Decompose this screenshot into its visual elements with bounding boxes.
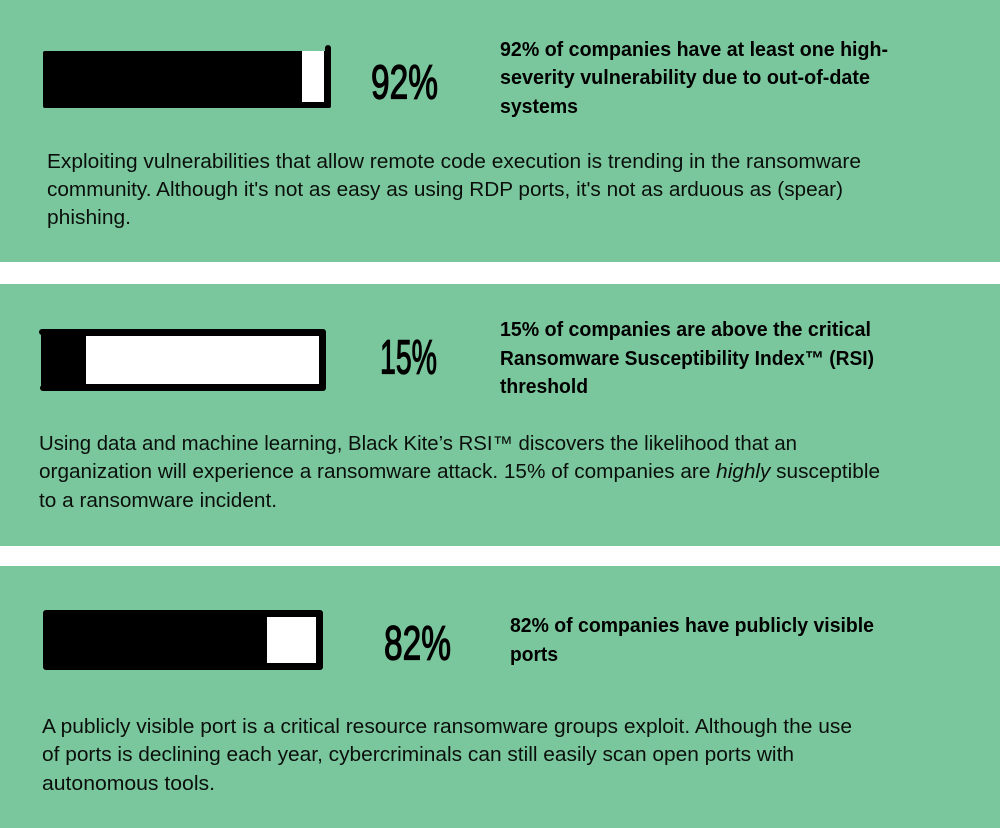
- panel: publicly visible ports: [0, 566, 1000, 828]
- body text: RSI explanation: to a ransomware incident.: [39, 490, 277, 512]
- heading: 82% of companies: [510, 615, 874, 666]
- heading: 92% of companies: 92% of companies have at least one high-: [500, 39, 888, 61]
- body text: port exploitation: of ports is declining each year, cybercriminals can still easily scan open ports with: [42, 744, 794, 766]
- body text: RSI explanation: [39, 433, 880, 512]
- heading: 15% of companies: threshold: [500, 376, 588, 398]
- heading: 15% of companies: Ransomware Susceptibility Index™ (RSI): [500, 348, 874, 370]
- heading: 15% of companies: 15% of companies are above the critical: [500, 319, 871, 341]
- body text: remote code execution: phishing.: [47, 207, 131, 229]
- body text: RSI explanation: organization will experience a ransomware attack. 15% of companies are highly susceptible: [39, 461, 880, 483]
- body text: remote code execution: [47, 151, 861, 229]
- heading: 92% of companies: severity vulnerability due to out-of-date: [500, 67, 870, 89]
- body text: remote code execution: community. Although it's not as easy as using RDP ports, it's not as arduous as (spear): [47, 179, 843, 201]
- body text: remote code execution: Exploiting vulnerabilities that allow remote code execution is trending in the ransomware: [47, 151, 861, 173]
- body text: port exploitation: [42, 716, 852, 795]
- body text: RSI explanation: Using data and machine learning, Black Kite’s RSI™ discovers the likelihood that an: [39, 433, 797, 455]
- progress bar: 15%: [39, 329, 326, 391]
- stat: 15%: 15%: [380, 332, 437, 384]
- body text: port exploitation: autonomous tools.: [42, 773, 215, 795]
- body text: port exploitation: A publicly visible port is a critical resource ransomware groups exploit. Although the use: [42, 716, 852, 738]
- panel: out-of-date systems: [0, 0, 1000, 262]
- panel: ransomware susceptibility index: [0, 284, 1000, 546]
- progress bar: 92%: [43, 45, 331, 108]
- heading: 92% of companies: systems: [500, 96, 578, 118]
- stat: 82%: 82%: [384, 618, 451, 670]
- stat: 92%: 92%: [371, 56, 438, 110]
- heading: 92% of companies: [500, 39, 888, 118]
- heading: 15% of companies: [500, 319, 874, 398]
- heading: 82% of companies: 82% of companies have publicly visible: [510, 615, 874, 637]
- heading: 82% of companies: ports: [510, 644, 558, 666]
- progress bar: 82%: [43, 610, 323, 670]
